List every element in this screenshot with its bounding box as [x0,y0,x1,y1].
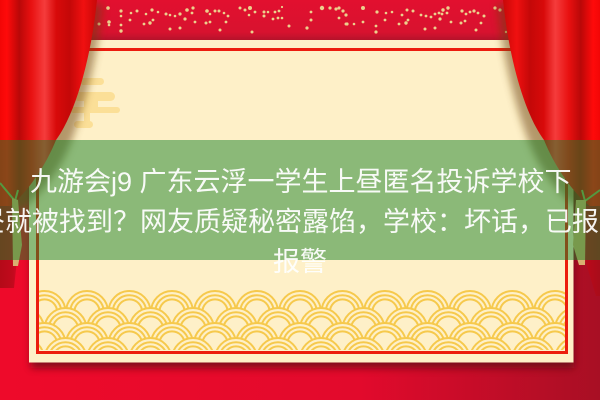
wave scallop pattern [39,290,565,350]
left curtain [0,0,97,288]
top band [0,0,600,40]
title text: ， [518,207,545,237]
title text: ： [437,207,464,237]
title text: 报警 [273,247,327,277]
curtain shadows [6,4,103,209]
cloud motif [70,78,120,128]
title overlay band [0,140,600,260]
right curtain [503,0,600,296]
gold sparkles [98,6,507,34]
title text: ， [356,207,383,237]
red inner border [38,50,566,352]
cream card [29,40,574,362]
card shadow [31,46,574,368]
title text: ？ [113,207,140,237]
title text: 九游会j9 广东云浮一学生上昼匿名投诉学校下 [30,167,572,197]
